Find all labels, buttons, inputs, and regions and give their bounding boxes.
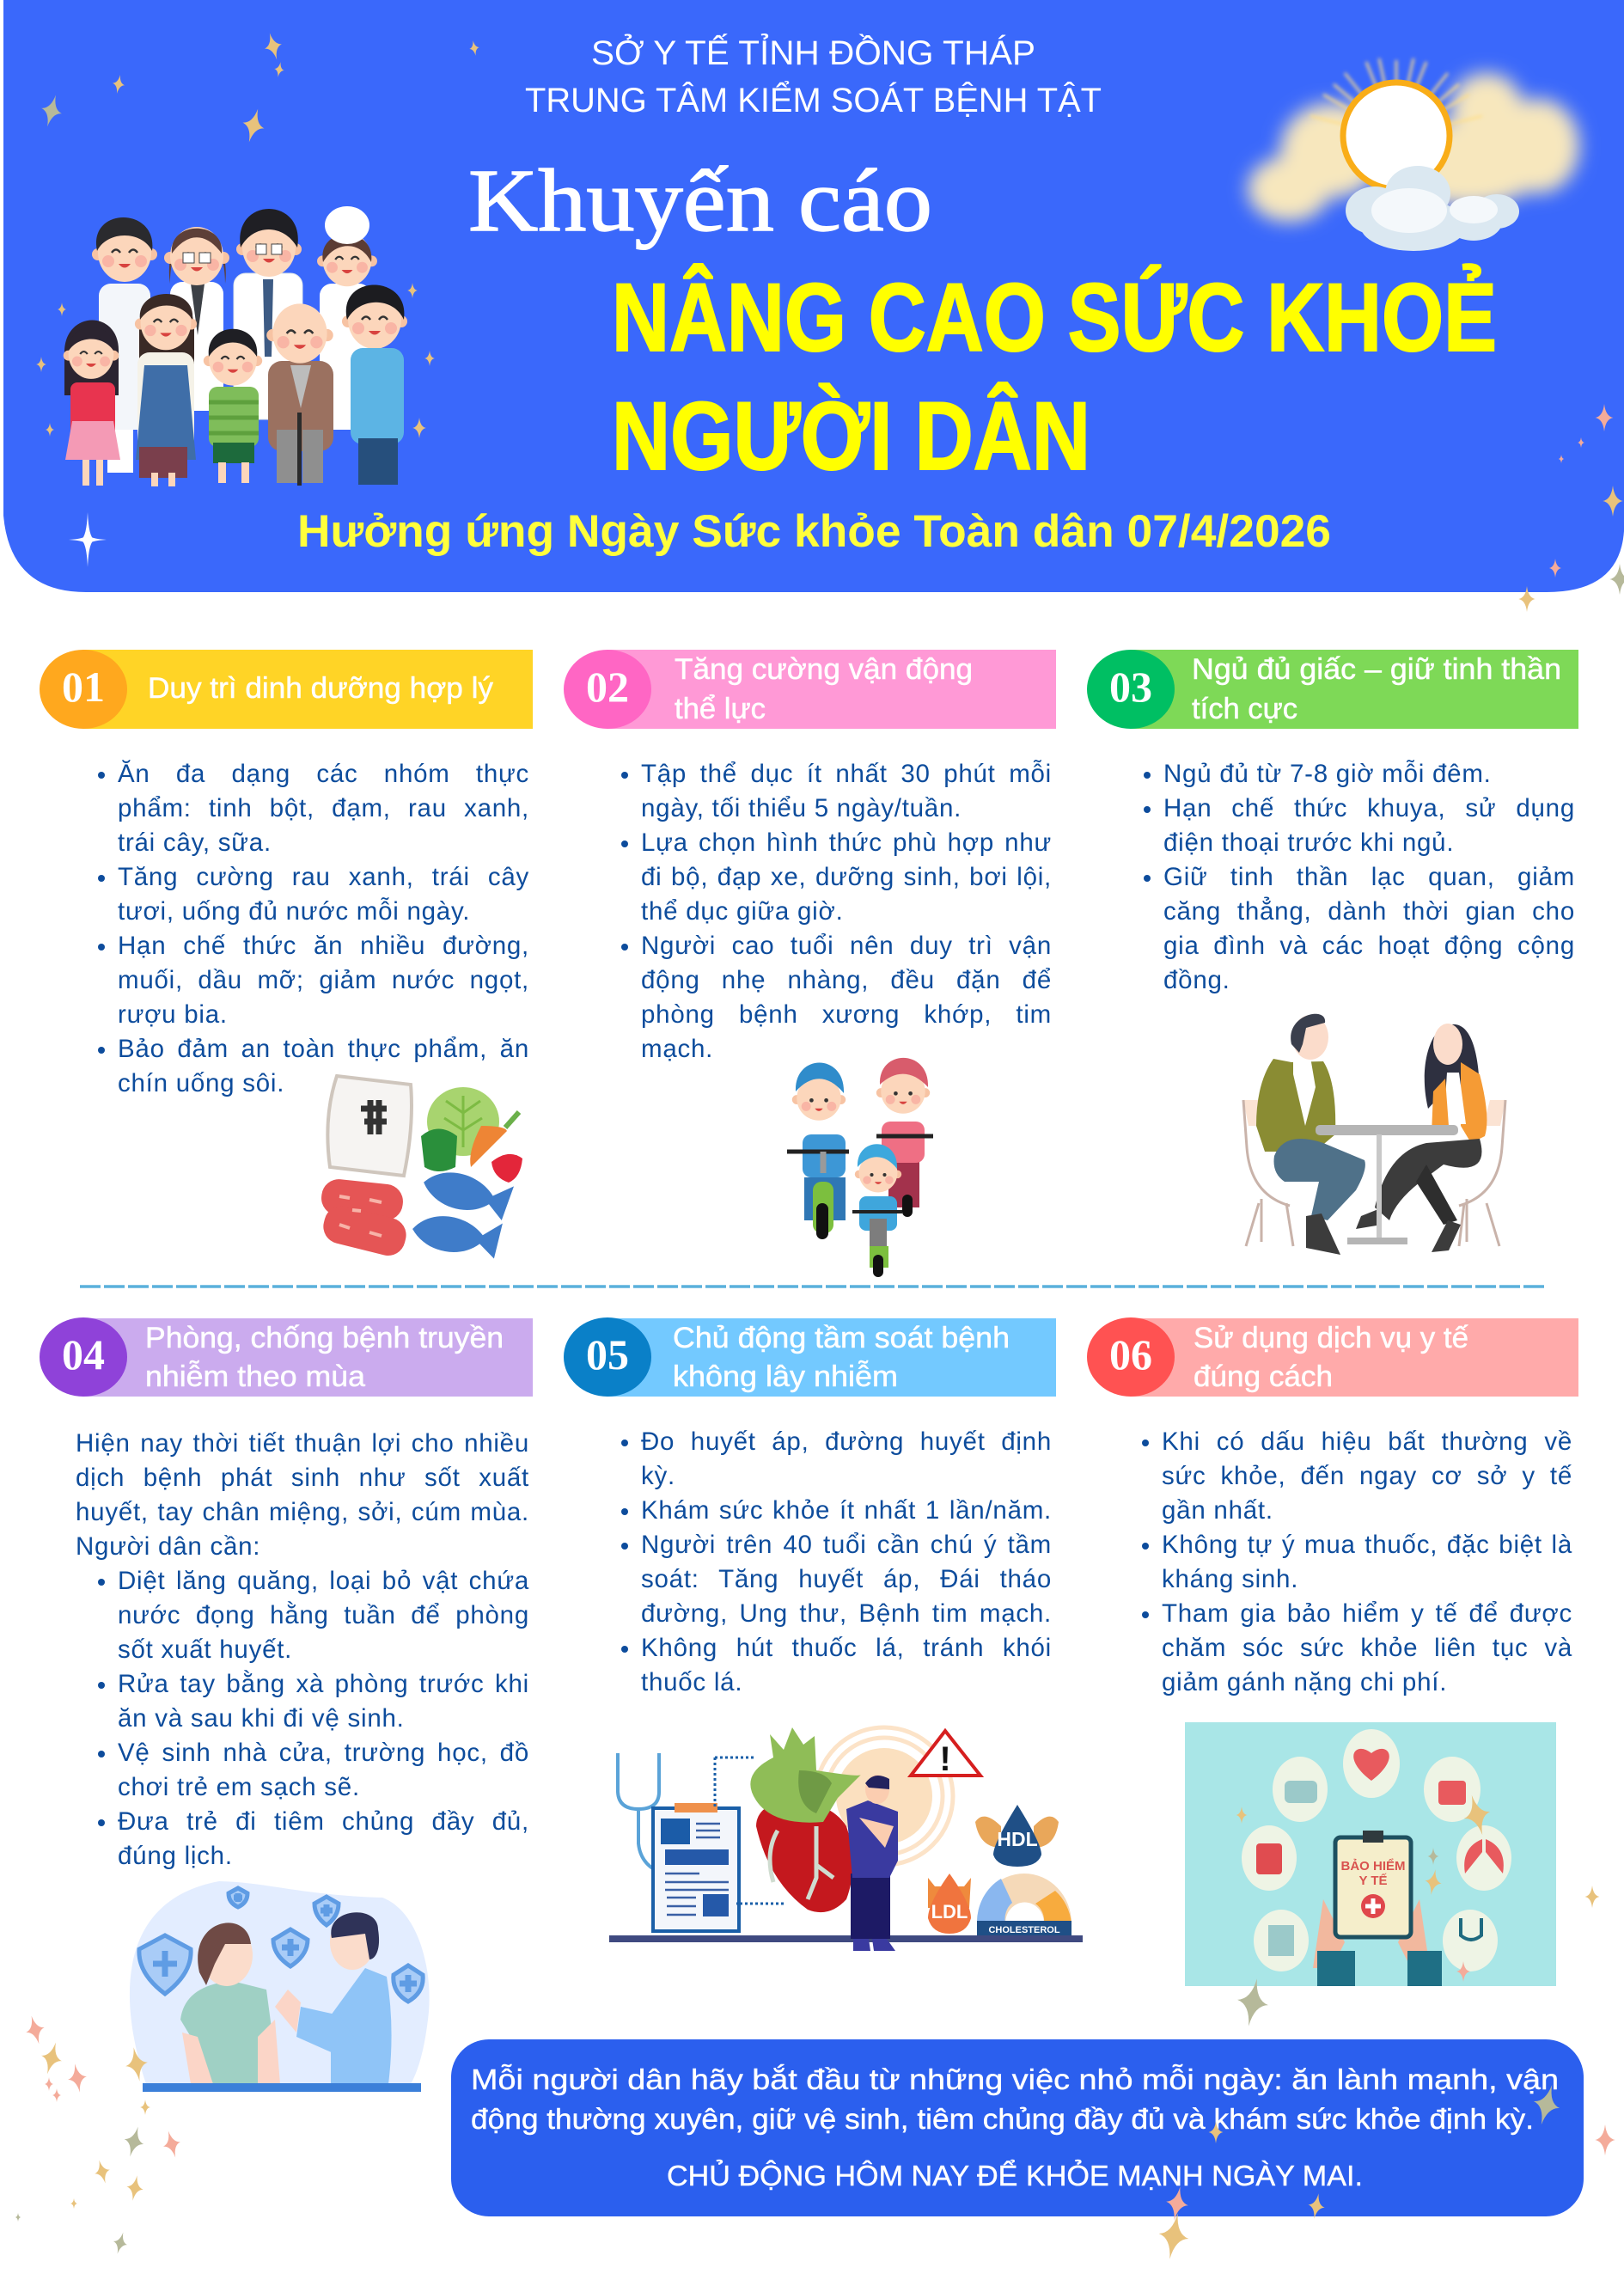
text block: section 06: gần nhất. (1162, 1496, 1273, 1525)
front people: girl (64, 320, 119, 395)
icon: heart and cholesterol (609, 1727, 1083, 1951)
text block: section 05: Người trên 40 tuổi cần chú ý tầm (641, 1531, 1052, 1559)
text block: section 05: kỳ. (641, 1462, 675, 1490)
text block: section 01: Tăng cường rau xanh, trái cây (118, 863, 529, 891)
text block: section 04 list: sốt xuất huyết. (118, 1635, 292, 1664)
header 02 (564, 650, 1056, 729)
icon: heart and cholesterol: HDL (997, 1828, 1038, 1850)
text block: section 01: trái cây, sữa. (118, 828, 272, 857)
text block: section 01: muối, dầu mỡ; giảm nước ngọt, (118, 966, 529, 994)
callout: closing message: Mỗi người dân hãy bắt đầu từ những việc nhỏ mỗi ngày: ăn lành mạnh, vận (471, 2063, 1559, 2095)
header 02: thể lực (675, 693, 766, 725)
text block: section 01: tươi, uống đủ nước mỗi ngày. (118, 897, 470, 926)
text block: section 03: Hạn chế thức khuya, sử dụng (1163, 794, 1575, 822)
callout: closing message (451, 2039, 1584, 2216)
icon: food group (320, 1076, 522, 1259)
front people: right man (342, 290, 407, 349)
header 03 (1087, 650, 1578, 729)
text block: section 01: Hạn chế thức ăn nhiều đường, (118, 932, 529, 960)
text block: section 02: phòng bệnh xương khớp, tim (641, 1000, 1052, 1029)
text block: section 04 list: ăn và sau khi đi vệ sinh. (118, 1704, 405, 1733)
HDL (975, 1817, 1059, 1848)
text block: section 02: Lựa chọn hình thức phù hợp như (641, 828, 1052, 857)
text block: section 04 list: đúng lịch. (118, 1842, 233, 1870)
text block: section 02: đi bộ, đạp xe, dưỡng sinh, bơi lội, (641, 863, 1052, 891)
subtitle: Hưởng ứng Ngày Sức khỏe Toàn dân 07/4/2026 (297, 506, 1331, 557)
text block: section 05: Đo huyết áp, đường huyết định (641, 1427, 1052, 1456)
front people: boy (204, 333, 262, 386)
text block: section 03 (1144, 760, 1575, 994)
header 02: 02 (586, 663, 629, 711)
header 04: nhiễm theo mùa (145, 1360, 365, 1393)
text block: section 03: điện thoại trước khi ngủ. (1163, 828, 1454, 857)
service circles (1242, 1729, 1511, 1971)
text block: section 06: Không tự ý mua thuốc, đặc biệt là (1162, 1531, 1572, 1559)
front people: mother (139, 296, 194, 370)
header 03: tích cực (1192, 693, 1297, 725)
text block: section 05: thuốc lá. (641, 1668, 742, 1696)
text block: section 04 list: chơi trẻ em sạch sẽ. (118, 1773, 360, 1801)
icon: children cycling (787, 1058, 933, 1277)
panel: health insurance illustration: Y TẾ (1358, 1874, 1388, 1888)
callout: closing message: CHỦ ĐỘNG HÔM NAY ĐỂ KHỎE MẠNH NGÀY MAI. (667, 2160, 1363, 2191)
text block: section 03: Ngủ đủ từ 7-8 giờ mỗi đêm. (1163, 760, 1492, 788)
text block: section 03: căng thẳng, dành thời gian cho (1163, 897, 1575, 926)
heart (756, 1800, 852, 1912)
text block: section 01: Bảo đảm an toàn thực phẩm, ăn (118, 1035, 529, 1063)
text block: section 04 intro: huyết, tay chân miệng, sởi, cúm mùa. (76, 1498, 529, 1526)
text block: section 03: Giữ tinh thần lạc quan, giảm (1163, 863, 1575, 891)
text block: section 01: phẩm: tinh bột, đạm, rau xanh, (118, 794, 529, 822)
header 04 (40, 1317, 533, 1397)
clipboard with hands (1313, 1899, 1345, 1968)
text block: section 04 intro (76, 1429, 529, 1561)
icon: heart and cholesterol: ! (939, 1740, 951, 1778)
text block: section 06 (1142, 1427, 1572, 1696)
header 02: Tăng cường vận động (675, 653, 973, 686)
front rider (852, 1144, 902, 1277)
text block: section 05: Không hút thuốc lá, tránh khói (641, 1634, 1052, 1662)
header banner (3, 0, 1624, 592)
text block: section 02: Người cao tuổi nên duy trì vận (641, 932, 1052, 960)
text block: section 04 list: nước đọng hằng tuần để phòng (118, 1601, 529, 1629)
header 05: không lây nhiễm (673, 1360, 898, 1393)
doctor (331, 1968, 392, 2084)
header 05 (564, 1317, 1056, 1397)
text block: section 05: đường, Ung thư, Bệnh tim mạch. (641, 1599, 1052, 1628)
back row coats (99, 284, 150, 430)
icon: vaccination scene (130, 1881, 430, 2092)
text block: section 05: soát: Tăng huyết áp, Đái tháo (641, 1565, 1052, 1593)
text block: section 06: giảm gánh nặng chi phí. (1162, 1668, 1447, 1696)
LDL (928, 1878, 971, 1908)
text block: section 01: Ăn đa dạng các nhóm thực (118, 760, 529, 788)
text block: section 02: động nhẹ nhàng, đều đặn để (641, 966, 1052, 994)
text block: section 01 (98, 760, 529, 1097)
text block: section 02: thể dục giữa giờ. (641, 897, 844, 926)
icon: couple talking at table (1243, 1014, 1505, 1255)
icon: heart and cholesterol: CHOLESTEROL (988, 1925, 1060, 1935)
header 05: Chủ động tầm soát bệnh (673, 1322, 1010, 1354)
panel: health insurance illustration: BẢO HIỂM (1340, 1858, 1406, 1874)
header 06: đúng cách (1194, 1360, 1333, 1393)
text block: section 06: Khi có dấu hiệu bất thường về (1162, 1427, 1572, 1456)
warning triangle (911, 1731, 980, 1776)
pink rider (876, 1058, 933, 1217)
text block: section 04 list: Rửa tay bằng xà phòng trước khi (118, 1670, 529, 1698)
text block: section 04 list: Đưa trẻ đi tiêm chủng đầy đủ, (118, 1807, 529, 1836)
text block: section 02: Tập thể dục ít nhất 30 phút mỗi (641, 760, 1052, 788)
title: main yellow heading: NGƯỜI DÂN (612, 382, 1090, 490)
header 05: 05 (586, 1330, 629, 1378)
divider (80, 1285, 1546, 1288)
header 01 (40, 650, 533, 729)
text block: section 04 intro: Hiện nay thời tiết thuận lợi cho nhiều (76, 1429, 529, 1458)
clipboard (653, 1808, 739, 1931)
man (1256, 1059, 1335, 1152)
text block: section 04 list: Diệt lăng quăng, loại bỏ vật chứa (118, 1567, 529, 1595)
title: Khuyến cáo: Khuyến cáo (468, 151, 932, 250)
header 06: 06 (1109, 1330, 1152, 1378)
front people: grandfather (268, 361, 333, 451)
text block: section 02: ngày, tối thiểu 5 ngày/tuần. (641, 794, 962, 822)
header 04: Phòng, chống bệnh truyền (145, 1322, 504, 1354)
blue rider (787, 1062, 849, 1239)
patient (180, 1981, 273, 2084)
icon: family and medical staff group (64, 206, 407, 486)
text block: section 06: chăm sóc sức khỏe liên tục và (1162, 1634, 1572, 1662)
person (851, 1874, 890, 1939)
text block: section 01: chín uống sôi. (118, 1069, 284, 1097)
text block: section 05: Khám sức khỏe ít nhất 1 lần/năm. (641, 1496, 1052, 1525)
stethoscope (618, 1753, 659, 1869)
text block: section 01: rượu bia. (118, 1000, 228, 1029)
text block: section 05 (621, 1427, 1052, 1696)
text block: section 04 intro: dịch bệnh phát sinh như sốt xuất (76, 1464, 529, 1492)
organisation name: SỞ Y TẾ TỈNH ĐỒNG THÁP (591, 33, 1035, 72)
halo (815, 1727, 953, 1865)
header 01: Duy trì dinh dưỡng hợp lý (148, 672, 493, 705)
header 03: 03 (1109, 663, 1152, 711)
text block: section 03: đồng. (1163, 966, 1230, 994)
cholesterol gauge (977, 1874, 1071, 1923)
header 03: Ngủ đủ giấc – giữ tinh thần (1192, 653, 1561, 686)
text block: section 06: kháng sinh. (1162, 1565, 1298, 1593)
text block: section 04 intro: Người dân cần: (76, 1532, 260, 1561)
header 06: Sử dụng dịch vụ y tế (1194, 1322, 1468, 1354)
text block: section 06: sức khỏe, đến ngay cơ sở y tế (1162, 1462, 1572, 1490)
organisation name (525, 33, 1102, 119)
text block: section 04 list: Vệ sinh nhà cửa, trường học, đồ (118, 1739, 529, 1767)
title: main yellow heading (612, 264, 1497, 490)
panel: health insurance illustration (1185, 1722, 1556, 1986)
header 01: 01 (62, 663, 105, 711)
text block: section 04 list (98, 1567, 529, 1870)
shields (139, 1888, 423, 2002)
woman (1425, 1024, 1480, 1109)
callout: closing message: động thường xuyên, giữ vệ sinh, tiêm chủng đầy đủ và khám sức khỏe định kỳ. (471, 2103, 1534, 2135)
text block: section 03: gia đình và các hoạt động cộng (1163, 932, 1575, 960)
header 04: 04 (62, 1330, 105, 1378)
header 06 (1087, 1317, 1578, 1397)
icon: heart and cholesterol: LDL (931, 1901, 968, 1923)
icon: sun and clouds (1248, 58, 1579, 251)
table (1316, 1125, 1458, 1135)
text block: section 06: Tham gia bảo hiểm y tế để được (1162, 1599, 1572, 1628)
text block: section 02 (621, 760, 1052, 1063)
organisation name: TRUNG TÂM KIỂM SOÁT BỆNH TẬT (525, 79, 1102, 119)
text block: section 02: mạch. (641, 1035, 713, 1063)
